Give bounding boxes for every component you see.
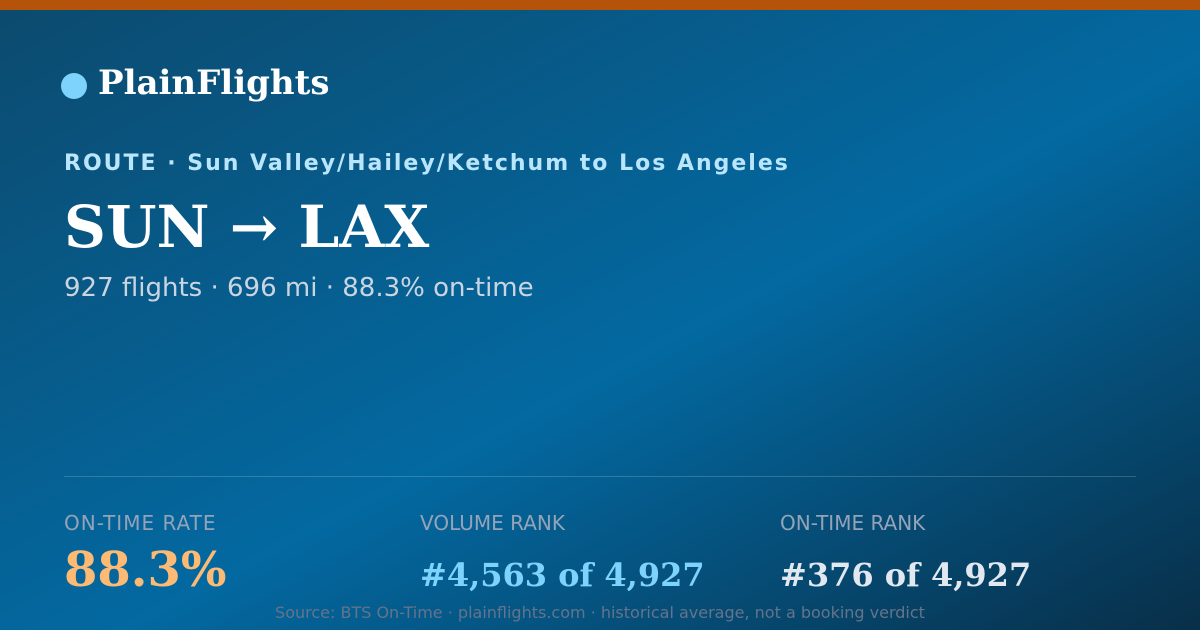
value: #4,563 of 4,927 bbox=[420, 556, 705, 594]
value: #376 of 4,927 bbox=[780, 556, 1031, 594]
brand logo bbox=[61, 63, 329, 103]
stat: volume rank bbox=[420, 511, 705, 594]
route headline: SUN → LAX bbox=[64, 193, 429, 261]
label: ON-TIME RATE bbox=[64, 511, 217, 535]
route eyebrow: ROUTE · Sun Valley/Hailey/Ketchum to Los Angeles bbox=[64, 151, 790, 176]
label: VOLUME RANK bbox=[420, 511, 565, 535]
top accent bar bbox=[0, 0, 1200, 10]
brand name: PlainFlights bbox=[98, 63, 329, 103]
route summary: 927 flights · 696 mi · 88.3% on-time bbox=[64, 273, 534, 303]
source footnote: Source: BTS On-Time · plainflights.com · historical average, not a booking verdict bbox=[275, 603, 925, 622]
label: ON-TIME RANK bbox=[780, 511, 925, 535]
stat: on-time rate bbox=[64, 511, 227, 598]
stat: on-time rank bbox=[780, 511, 1031, 594]
value: 88.3% bbox=[64, 542, 227, 598]
icon: brand dot bbox=[61, 73, 87, 99]
